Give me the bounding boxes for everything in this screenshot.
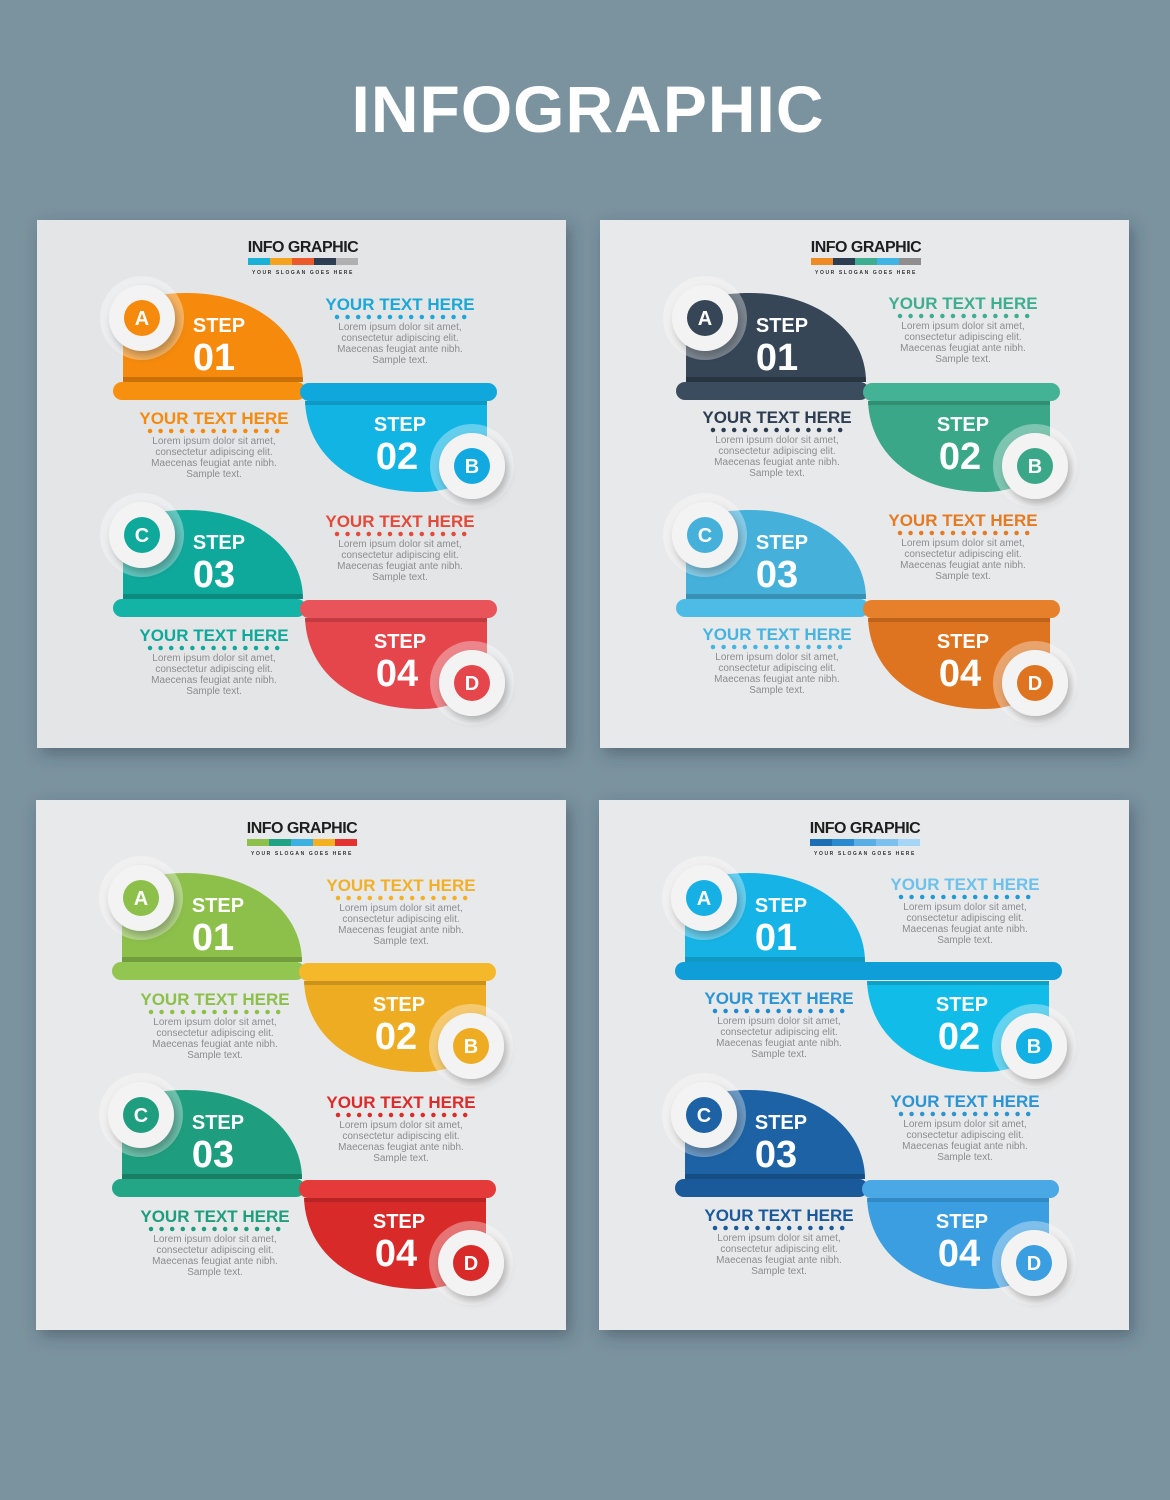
text block right: Maecenas feugiat ante nibh. (902, 1141, 1028, 1152)
logo (810, 820, 921, 857)
step 04: 04 (376, 653, 418, 695)
step 03 (676, 510, 869, 617)
badge A (662, 856, 746, 940)
text block right: consectetur adipiscing elit. (906, 1130, 1024, 1141)
badge D (993, 641, 1077, 725)
text block right: Maecenas feugiat ante nibh. (337, 561, 463, 572)
text block left: consectetur adipiscing elit. (718, 663, 836, 674)
text block left: Sample text. (187, 1050, 243, 1061)
text block right: YOUR TEXT HERE (325, 512, 475, 531)
step 02 (867, 981, 1049, 1072)
text block top right (888, 294, 1038, 365)
badge C (663, 493, 747, 577)
step 02: 02 (376, 436, 418, 478)
text block left: Maecenas feugiat ante nibh. (716, 1038, 842, 1049)
text block right: YOUR TEXT HERE (888, 511, 1038, 530)
text block right (888, 511, 1038, 582)
text block left: Lorem ipsum dolor sit amet, (153, 1017, 277, 1028)
badge C: C (698, 525, 712, 547)
badge A (100, 276, 184, 360)
panel: green/yellow/red variant (36, 800, 566, 1330)
step 04 (862, 1180, 1059, 1289)
step 03: 03 (193, 554, 235, 596)
badge B: B (1028, 456, 1042, 478)
step 01: STEP (193, 315, 245, 337)
text block left: YOUR TEXT HERE (704, 989, 854, 1008)
step 04: STEP (937, 631, 989, 653)
badge C (99, 1073, 183, 1157)
text block top right: Lorem ipsum dolor sit amet, (338, 322, 462, 333)
badge A: A (697, 888, 711, 910)
badge B: B (465, 456, 479, 478)
text block left: consectetur adipiscing elit. (156, 1028, 274, 1039)
logo: INFO GRAPHIC (810, 820, 921, 837)
step 01 (113, 293, 306, 400)
text block top right: consectetur adipiscing elit. (341, 333, 459, 344)
text block left: consectetur adipiscing elit. (720, 1027, 838, 1038)
text block left: YOUR TEXT HERE (140, 1207, 290, 1226)
text block left: consectetur adipiscing elit. (720, 1244, 838, 1255)
step 02: STEP (373, 994, 425, 1016)
text block top right: Maecenas feugiat ante nibh. (900, 343, 1026, 354)
text block left: Maecenas feugiat ante nibh. (714, 457, 840, 468)
text block left: Lorem ipsum dolor sit amet, (152, 653, 276, 664)
text block left: YOUR TEXT HERE (139, 409, 289, 428)
text block left: consectetur adipiscing elit. (155, 664, 273, 675)
badge A (99, 856, 183, 940)
step 02: 02 (938, 1016, 980, 1058)
step 03 (675, 1090, 868, 1197)
text block right: Sample text. (935, 571, 991, 582)
step 03 (112, 1090, 305, 1197)
step 03: 03 (756, 554, 798, 596)
step 04: 04 (939, 653, 981, 695)
text block right: Lorem ipsum dolor sit amet, (901, 538, 1025, 549)
step 03: STEP (192, 1112, 244, 1134)
logo: YOUR SLOGAN GOES HERE (815, 270, 917, 276)
text block right: consectetur adipiscing elit. (341, 550, 459, 561)
text block left (140, 990, 290, 1061)
text block left: Sample text. (751, 1049, 807, 1060)
badge D (429, 1221, 513, 1305)
text block left: consectetur adipiscing elit. (156, 1245, 274, 1256)
text block left: Sample text. (186, 469, 242, 480)
logo: INFO GRAPHIC (247, 820, 358, 837)
text block top right: Lorem ipsum dolor sit amet, (339, 903, 463, 914)
logo: INFO GRAPHIC (248, 239, 359, 256)
text block left: YOUR TEXT HERE (139, 626, 289, 645)
text block right: Sample text. (373, 1153, 429, 1164)
badge C: C (135, 525, 149, 547)
logo: YOUR SLOGAN GOES HERE (251, 851, 353, 857)
title: INFOGRAPHIC (352, 72, 824, 146)
badge B (993, 424, 1077, 508)
step 01: 01 (192, 917, 234, 959)
text block left (704, 1206, 854, 1277)
text block right: Lorem ipsum dolor sit amet, (903, 1119, 1027, 1130)
badge B (429, 1004, 513, 1088)
step 04: 04 (938, 1233, 980, 1275)
text block left: Maecenas feugiat ante nibh. (152, 1256, 278, 1267)
text block left: Lorem ipsum dolor sit amet, (715, 652, 839, 663)
text block left: consectetur adipiscing elit. (155, 447, 273, 458)
badge B (430, 424, 514, 508)
text block left: YOUR TEXT HERE (702, 408, 852, 427)
text block left: Sample text. (749, 468, 805, 479)
step 02: STEP (937, 414, 989, 436)
text block top right (326, 876, 476, 947)
step 01: STEP (755, 895, 807, 917)
text block top right: Maecenas feugiat ante nibh. (337, 344, 463, 355)
step 01: 01 (193, 337, 235, 379)
text block top right: YOUR TEXT HERE (326, 876, 476, 895)
text block right: Maecenas feugiat ante nibh. (338, 1142, 464, 1153)
text block left: Maecenas feugiat ante nibh. (151, 675, 277, 686)
step 03: STEP (756, 532, 808, 554)
text block left (702, 408, 852, 479)
text block right: Lorem ipsum dolor sit amet, (339, 1120, 463, 1131)
step 03: STEP (193, 532, 245, 554)
badge B: B (464, 1036, 478, 1058)
badge B (992, 1004, 1076, 1088)
text block right: consectetur adipiscing elit. (904, 549, 1022, 560)
panel: blue variant (599, 800, 1129, 1330)
badge D (992, 1221, 1076, 1305)
text block top right (890, 875, 1040, 946)
text block left (140, 1207, 290, 1278)
text block left (139, 409, 289, 480)
step 01 (675, 873, 1062, 980)
text block right: Maecenas feugiat ante nibh. (900, 560, 1026, 571)
text block top right: Lorem ipsum dolor sit amet, (901, 321, 1025, 332)
panel: orange/cyan variant (37, 220, 566, 748)
badge A (663, 276, 747, 360)
text block right (325, 512, 475, 583)
text block top right: consectetur adipiscing elit. (906, 913, 1024, 924)
badge D: D (1028, 673, 1042, 695)
text block left: consectetur adipiscing elit. (718, 446, 836, 457)
logo (248, 239, 359, 276)
step 04 (299, 1180, 496, 1289)
step 03: 03 (192, 1134, 234, 1176)
badge D: D (465, 673, 479, 695)
logo: INFO GRAPHIC (811, 239, 922, 256)
text block left: Sample text. (186, 686, 242, 697)
text block left: Lorem ipsum dolor sit amet, (152, 436, 276, 447)
text block right: Lorem ipsum dolor sit amet, (338, 539, 462, 550)
text block right (326, 1093, 476, 1164)
text block left: Maecenas feugiat ante nibh. (152, 1039, 278, 1050)
text block top right: Lorem ipsum dolor sit amet, (903, 902, 1027, 913)
text block top right: Sample text. (935, 354, 991, 365)
step 02: 02 (375, 1016, 417, 1058)
text block right: Sample text. (372, 572, 428, 583)
text block left: Maecenas feugiat ante nibh. (151, 458, 277, 469)
logo: YOUR SLOGAN GOES HERE (814, 851, 916, 857)
step 04: STEP (373, 1211, 425, 1233)
badge D: D (1027, 1253, 1041, 1275)
step 01 (676, 293, 869, 400)
text block left: Maecenas feugiat ante nibh. (714, 674, 840, 685)
text block left: YOUR TEXT HERE (140, 990, 290, 1009)
text block top right: Maecenas feugiat ante nibh. (902, 924, 1028, 935)
badge A: A (134, 888, 148, 910)
step 04 (300, 600, 497, 709)
logo (247, 820, 358, 857)
badge C (662, 1073, 746, 1157)
text block right: Sample text. (937, 1152, 993, 1163)
step 04: STEP (936, 1211, 988, 1233)
badge C: C (134, 1105, 148, 1127)
logo (811, 239, 922, 276)
step 02 (299, 963, 496, 1072)
step 04: 04 (375, 1233, 417, 1275)
text block right: consectetur adipiscing elit. (342, 1131, 460, 1142)
step 01 (112, 873, 305, 980)
step 01: 01 (756, 337, 798, 379)
text block left: Sample text. (749, 685, 805, 696)
step 03 (113, 510, 306, 617)
text block left: Lorem ipsum dolor sit amet, (717, 1233, 841, 1244)
text block top right (325, 295, 475, 366)
step 02 (300, 383, 497, 492)
text block left: Lorem ipsum dolor sit amet, (717, 1016, 841, 1027)
badge C: C (697, 1105, 711, 1127)
text block left: YOUR TEXT HERE (704, 1206, 854, 1225)
text block left: YOUR TEXT HERE (702, 625, 852, 644)
text block left (704, 989, 854, 1060)
panel: dark/teal/orange variant (600, 220, 1129, 748)
text block top right: Maecenas feugiat ante nibh. (338, 925, 464, 936)
text block left (139, 626, 289, 697)
text block top right: Sample text. (373, 936, 429, 947)
step 04 (863, 600, 1060, 709)
text block top right: YOUR TEXT HERE (888, 294, 1038, 313)
badge D: D (464, 1253, 478, 1275)
badge B: B (1027, 1036, 1041, 1058)
step 01: STEP (756, 315, 808, 337)
text block right: YOUR TEXT HERE (326, 1093, 476, 1112)
text block right: YOUR TEXT HERE (890, 1092, 1040, 1111)
step 04: STEP (374, 631, 426, 653)
text block top right: Sample text. (937, 935, 993, 946)
step 03: STEP (755, 1112, 807, 1134)
text block left (702, 625, 852, 696)
text block left: Maecenas feugiat ante nibh. (716, 1255, 842, 1266)
text block left: Sample text. (187, 1267, 243, 1278)
step 02: STEP (936, 994, 988, 1016)
text block top right: Sample text. (372, 355, 428, 366)
badge A: A (135, 308, 149, 330)
text block top right: YOUR TEXT HERE (890, 875, 1040, 894)
badge A: A (698, 308, 712, 330)
text block left: Lorem ipsum dolor sit amet, (153, 1234, 277, 1245)
text block top right: YOUR TEXT HERE (325, 295, 475, 314)
badge D (430, 641, 514, 725)
step 01: STEP (192, 895, 244, 917)
badge C (100, 493, 184, 577)
step 02: STEP (374, 414, 426, 436)
text block top right: consectetur adipiscing elit. (342, 914, 460, 925)
step 02: 02 (939, 436, 981, 478)
step 02 (863, 383, 1060, 492)
text block top right: consectetur adipiscing elit. (904, 332, 1022, 343)
text block left: Lorem ipsum dolor sit amet, (715, 435, 839, 446)
step 03: 03 (755, 1134, 797, 1176)
text block left: Sample text. (751, 1266, 807, 1277)
logo: YOUR SLOGAN GOES HERE (252, 270, 354, 276)
text block right (890, 1092, 1040, 1163)
step 01: 01 (755, 917, 797, 959)
